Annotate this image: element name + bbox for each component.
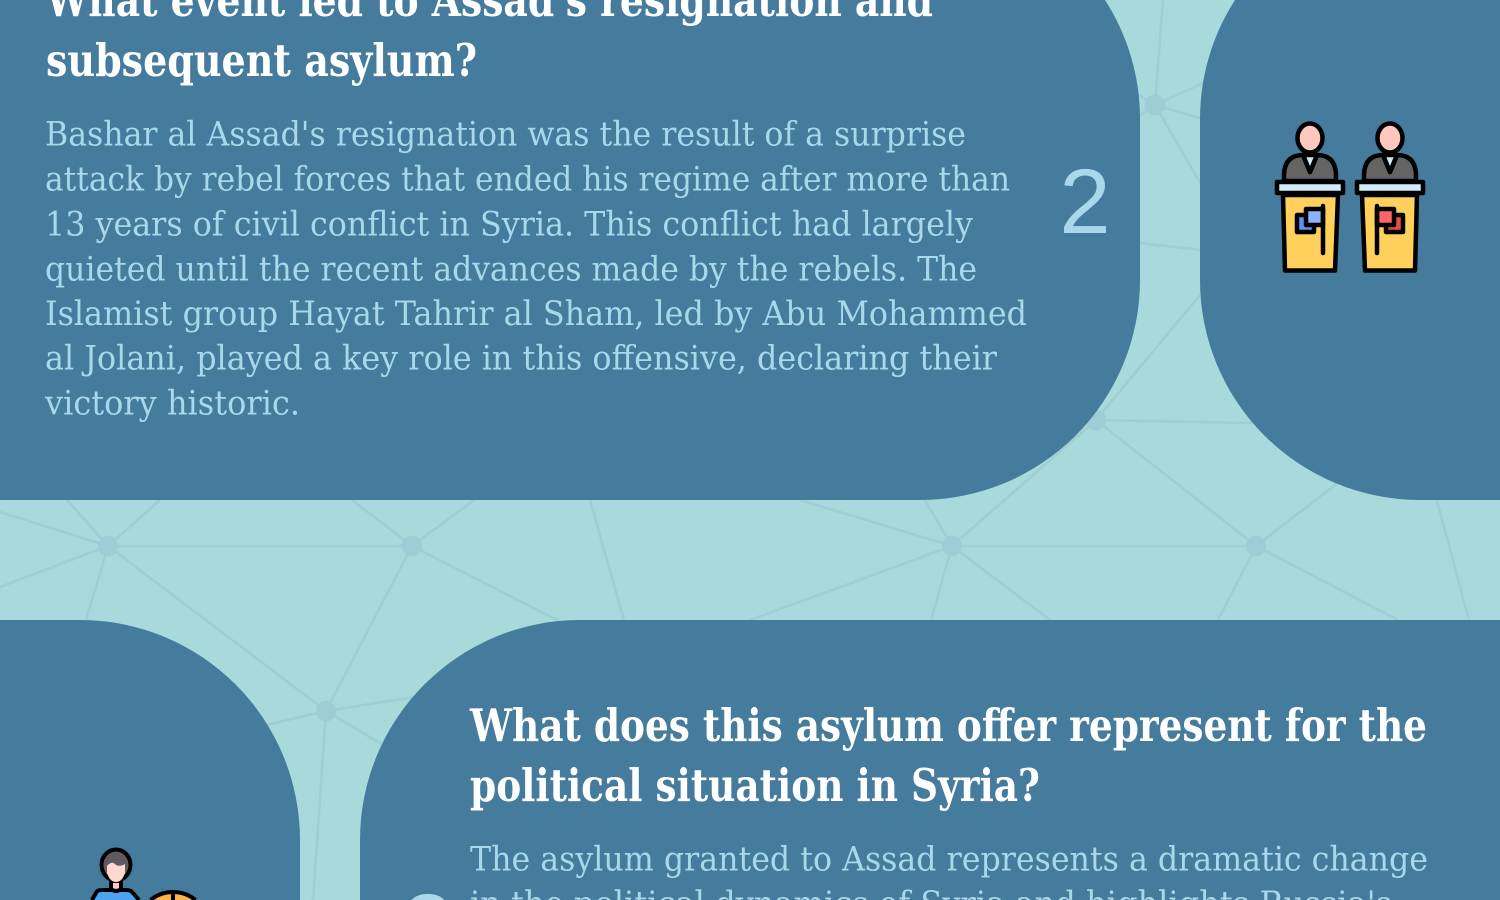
- panel: question 3 text: [360, 620, 1500, 900]
- text block: answer 3: [470, 840, 1428, 900]
- panel: question 2 text: [0, 0, 1140, 500]
- text block: answer 2: Bashar al Assad's resignation was the result of a surprise: [45, 114, 966, 154]
- text block: answer 2: 13 years of civil conflict in Syria. This conflict had largely: [45, 204, 974, 244]
- text block: answer 2: [44, 114, 1027, 424]
- icon: person with globe: [92, 850, 196, 900]
- heading: question 2: subsequent asylum?: [46, 34, 477, 87]
- text block: answer 2: Islamist group Hayat Tahrir al Sham, led by Abu Mohammed: [45, 294, 1027, 334]
- panel: question 3 icon: [0, 620, 300, 900]
- heading: question 2: [45, 0, 933, 87]
- number 2: 2: [1059, 151, 1111, 253]
- text block: answer 2: al Jolani, played a key role in this offensive, declaring their: [45, 338, 998, 378]
- heading: question 3: [469, 699, 1427, 812]
- text block: answer 2: quieted until the recent advances made by the rebels. The: [45, 250, 977, 290]
- text block: answer 3: The asylum granted to Assad represents a dramatic change: [470, 840, 1428, 880]
- text block: answer 2: victory historic.: [44, 384, 300, 424]
- icon: two politicians at podiums: [1277, 124, 1423, 270]
- panel: question 2 icon: [1200, 0, 1500, 500]
- heading: question 3: political situation in Syria?: [470, 759, 1040, 812]
- text block: answer 2: attack by rebel forces that ended his regime after more than: [45, 160, 1010, 200]
